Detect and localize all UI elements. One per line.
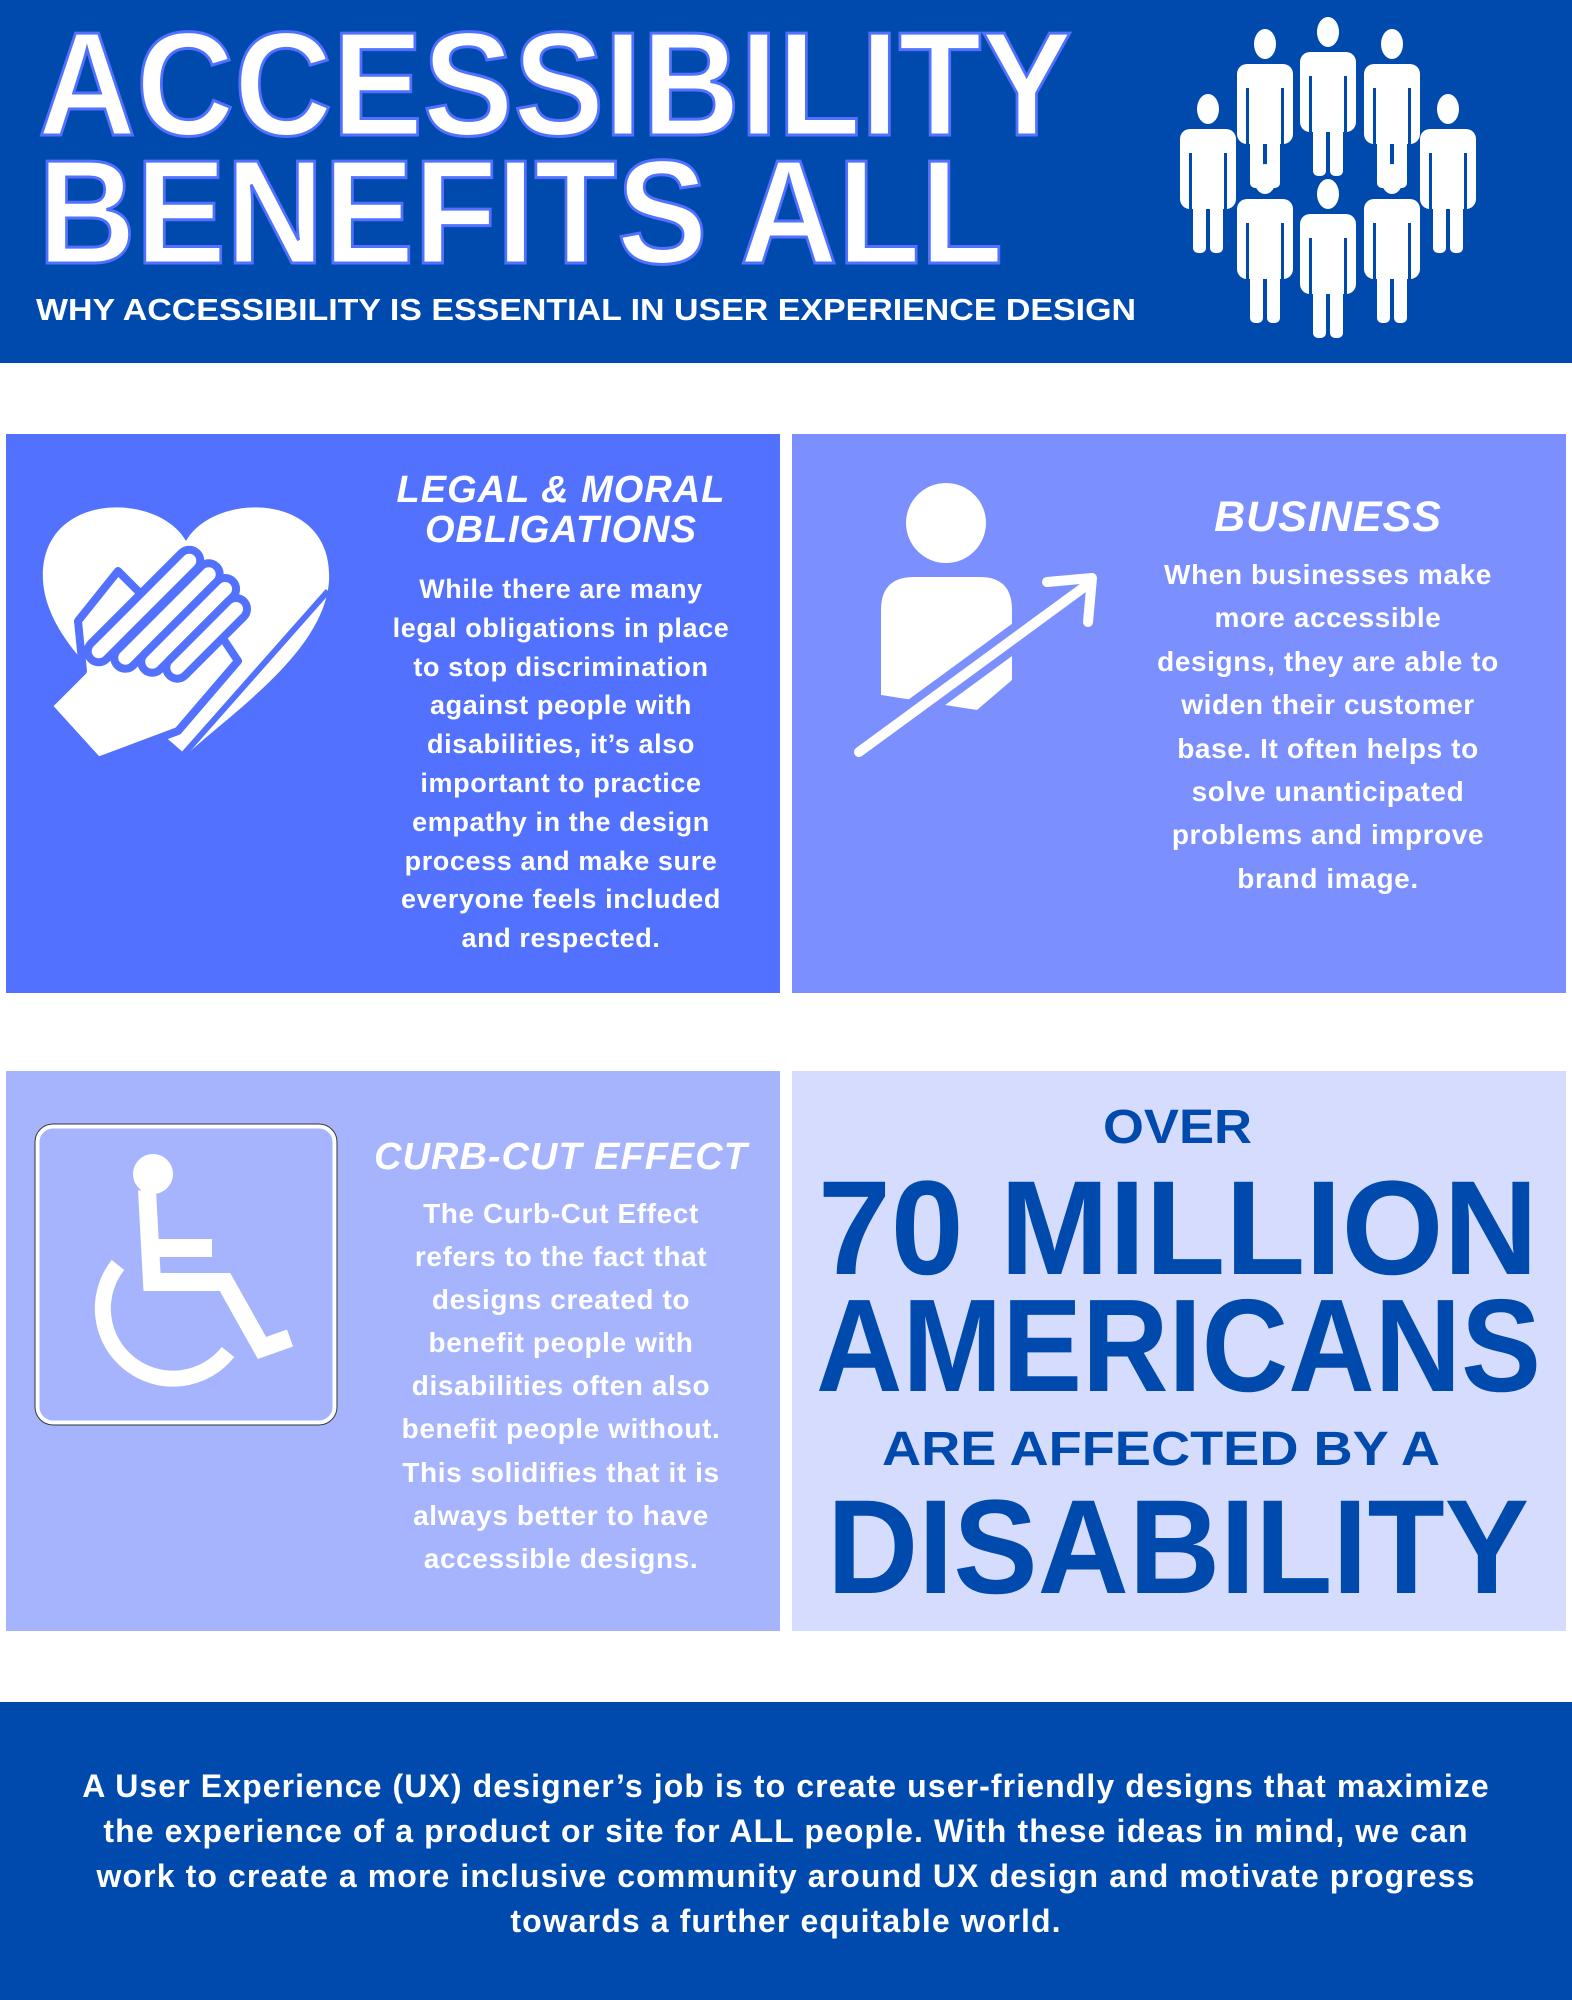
body text: benefit people with — [429, 1327, 693, 1358]
footer text: towards a further equitable world. — [510, 1903, 1062, 1939]
footer text: work to create a more inclusive community around UX design and motivate progress — [96, 1858, 1476, 1894]
body text: When businesses make — [1164, 559, 1492, 590]
body text: While there are many — [419, 574, 703, 604]
body text: designs, they are able to — [1157, 646, 1499, 677]
heading: CURB-CUT EFFECT — [374, 1136, 748, 1178]
panel: legal & moral obligations — [6, 434, 780, 993]
body text: empathy in the design — [412, 807, 710, 837]
body text: benefit people without. — [402, 1413, 720, 1444]
title: ACCESSIBILITY — [38, 2, 1072, 167]
body text — [402, 1198, 720, 1574]
footer text — [82, 1768, 1490, 1939]
body text: disabilities, it’s also — [427, 729, 695, 759]
header banner — [0, 0, 1572, 363]
body text: more accessible — [1215, 602, 1441, 633]
panel: curb-cut effect — [6, 1071, 780, 1631]
body text — [1157, 559, 1499, 894]
body text: against people with — [430, 690, 692, 720]
statistic text: ARE AFFECTED BY A — [882, 1423, 1440, 1476]
body text: to stop discrimination — [413, 652, 709, 682]
icon: heart with hand — [42, 507, 330, 756]
body text: accessible designs. — [424, 1543, 698, 1574]
icon: wheelchair sign — [34, 1124, 338, 1426]
body text: important to practice — [420, 768, 702, 798]
body text: This solidifies that it is — [402, 1457, 720, 1488]
heading — [397, 469, 725, 551]
body text: everyone feels included — [401, 884, 721, 914]
body text: disabilities often also — [412, 1370, 710, 1401]
body text: brand image. — [1237, 863, 1419, 894]
body text: widen their customer — [1181, 689, 1475, 720]
heading: BUSINESS — [1214, 493, 1442, 541]
body text: and respected. — [462, 923, 660, 953]
footer text: the experience of a product or site for ALL people. With these ideas in mind, we can — [103, 1813, 1469, 1849]
body text: problems and improve — [1172, 819, 1484, 850]
statistic text: OVER — [1103, 1101, 1252, 1154]
body text: refers to the fact that — [415, 1241, 707, 1272]
body text: base. It often helps to — [1177, 733, 1479, 764]
heading: OBLIGATIONS — [425, 509, 697, 551]
body text: legal obligations in place — [393, 613, 729, 643]
body text: designs created to — [432, 1284, 690, 1315]
title: BENEFITS ALL — [38, 130, 1003, 295]
body text — [393, 574, 729, 953]
statistic text: 70 MILLION — [818, 1154, 1538, 1303]
icon: group of people — [1180, 17, 1476, 338]
body text: solve unanticipated — [1192, 776, 1464, 807]
statistic text — [816, 1101, 1541, 1622]
subtitle: WHY ACCESSIBILITY IS ESSENTIAL IN USER EXPERIENCE DESIGN — [36, 292, 1136, 327]
footer — [0, 1702, 1572, 2000]
body text: The Curb-Cut Effect — [423, 1198, 699, 1229]
title — [38, 2, 1072, 295]
heading: LEGAL & MORAL — [397, 469, 725, 511]
panel: statistic — [792, 1071, 1566, 1631]
body text: always better to have — [413, 1500, 709, 1531]
footer text: A User Experience (UX) designer’s job is to create user-friendly designs that maximize — [82, 1768, 1490, 1804]
statistic text: DISABILITY — [827, 1473, 1529, 1622]
panel: business — [792, 434, 1566, 993]
body text: process and make sure — [405, 846, 717, 876]
icon: person with rising arrow — [854, 483, 1097, 757]
